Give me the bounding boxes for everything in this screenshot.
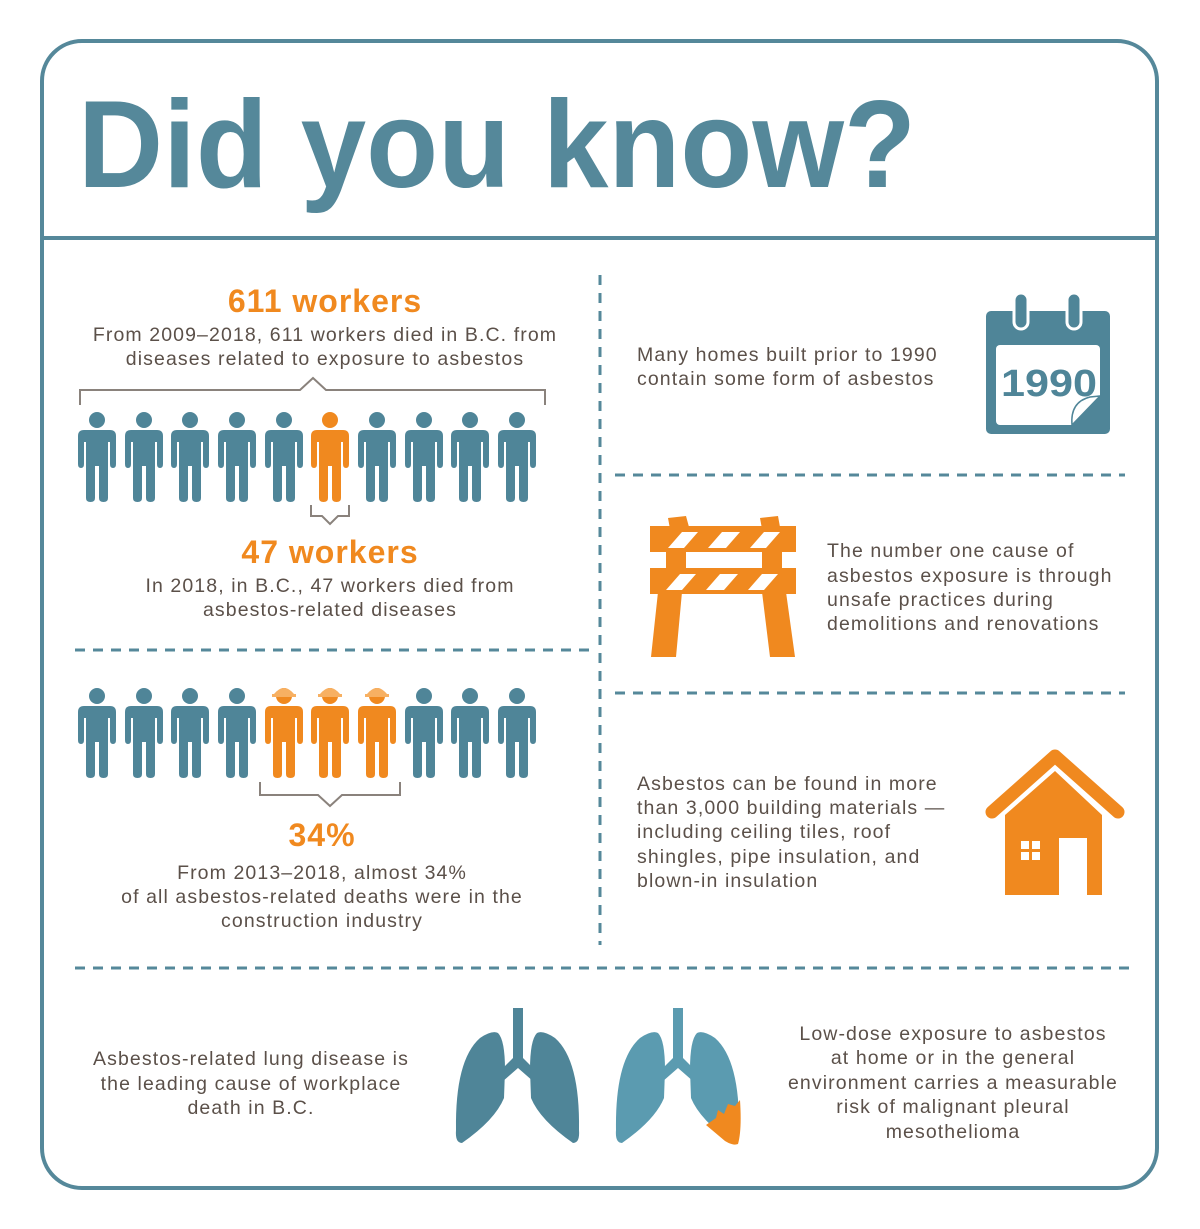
stat: 47 workers: 47 workers [241,534,419,570]
icon: barricade [650,516,796,657]
text: lung disease: the leading cause of workplace [101,1073,401,1095]
text: homes 1990: contain some form of asbestos [637,368,934,390]
stat: 611 workers: diseases related to exposure to asbestos [126,348,524,370]
text: building materials: Asbestos can be found in more [637,773,938,795]
text: building materials [637,773,945,892]
people row 1 [78,412,536,502]
text: building materials: blown-in insulation [637,870,818,892]
icon: diseased lungs [616,1008,741,1145]
stat: 34%: construction industry [221,910,423,932]
stat: 611 workers [93,283,557,370]
stat: 34%: 34% [288,817,356,853]
text: demolitions: The number one cause of [827,540,1075,562]
title: Did you know? [78,76,916,214]
text: lung disease [93,1048,409,1119]
text: demolitions: unsafe practices during [827,589,1054,611]
text: building materials: including ceiling tiles, roof [637,821,891,843]
text: low-dose exposure: mesothelioma [886,1121,1020,1143]
stat: 47 workers: In 2018, in B.C., 47 workers died from [145,575,515,597]
text: building materials: shingles, pipe insulation, and [637,846,920,868]
text: demolitions [827,540,1113,635]
stat: 34%: of all asbestos-related deaths were in the [121,886,523,908]
bracket top [80,378,545,405]
people row 2 [78,688,536,778]
stat: 47 workers [145,534,515,621]
text: low-dose exposure [788,1023,1118,1143]
text: low-dose exposure: environment carries a measurable [788,1072,1118,1094]
icon: healthy lungs [456,1008,579,1143]
stat: 34%: From 2013–2018, almost 34% [177,862,467,884]
text: low-dose exposure: risk of malignant pleural [836,1096,1070,1118]
text: low-dose exposure: at home or in the general [831,1047,1075,1069]
stat: 611 workers: From 2009–2018, 611 workers died in B.C. from [93,324,557,346]
text: building materials: than 3,000 building materials — [637,797,945,819]
text: lung disease: death in B.C. [187,1097,315,1119]
text: lung disease: Asbestos-related lung disease is [93,1048,409,1070]
stat: 47 workers: asbestos-related diseases [203,599,457,621]
text: low-dose exposure: Low-dose exposure to asbestos [799,1023,1107,1045]
text: demolitions: asbestos exposure is through [827,565,1113,587]
text: demolitions: demolitions and renovations [827,613,1100,635]
text: homes 1990: Many homes built prior to 1990 [637,344,938,366]
stat: 611 workers: 611 workers [228,283,422,319]
stat: 34% [121,817,523,932]
icon: calendar [986,293,1110,434]
icon: house [992,756,1118,895]
icon: calendar: 1990 [1001,363,1097,405]
text: homes 1990 [637,344,938,390]
